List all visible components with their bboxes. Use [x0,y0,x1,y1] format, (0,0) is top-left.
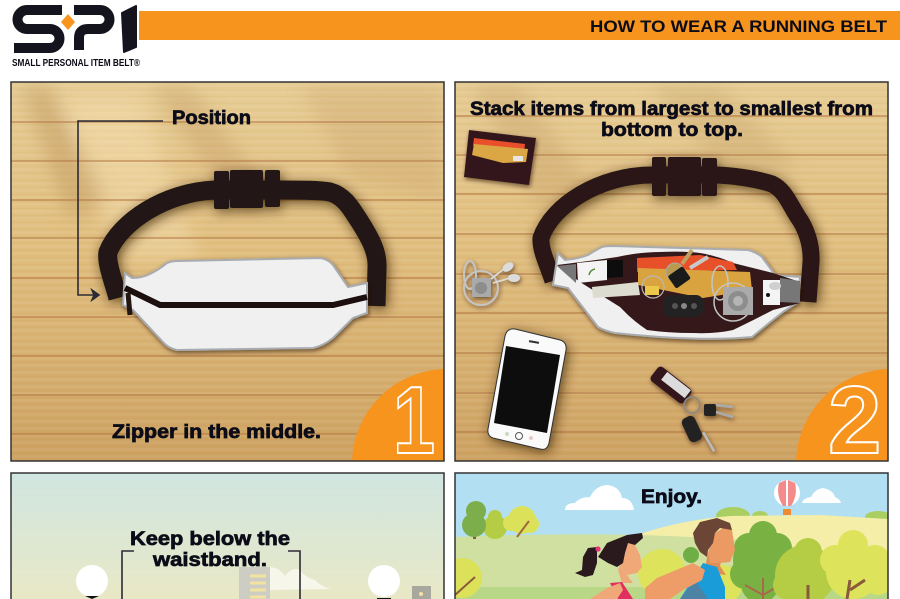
waistband brackets [122,551,300,599]
pouch interior [557,252,800,333]
small white device [763,280,781,305]
dark green tree [730,521,792,599]
cloud [270,567,331,590]
small building [412,586,431,599]
heading: stack items [470,99,873,141]
header bar [139,11,900,40]
zipper pull [128,293,130,315]
belt strap and buckle [541,157,811,302]
man runner [645,518,735,599]
trees upper left [462,501,539,539]
position arrow [78,121,163,300]
tree lower left [442,558,482,598]
panel 2: stacking items [456,82,888,460]
smartphone [488,329,566,449]
street lamp right [368,565,400,599]
position label: Position [172,108,251,129]
pouch sim chip [642,276,664,298]
heading: stack items: bottom to top. [601,120,743,141]
zipper [125,288,367,305]
yellow-green tree [773,538,835,599]
logo: SPI brand mark [14,6,136,52]
green field [455,534,888,599]
red card [637,255,737,272]
yellow hill [642,515,888,552]
woman runner [575,533,643,599]
yellow card [638,268,752,298]
header title: HOW TO WEAR A RUNNING BELT [590,17,888,36]
leaf behind man [683,547,699,563]
belt pouch [123,258,367,350]
open pouch [553,246,800,339]
ipod and cord in pouch [712,266,753,321]
clouds [565,485,841,510]
distant bushes [716,507,888,519]
logo tagline: SMALL PERSONAL ITEM BELT® [12,58,141,69]
pouch side tabs [557,264,800,303]
heading: stack items: Stack items from largest to smallest from [470,99,873,120]
street lamp left [76,565,108,599]
belt strap and buckle [108,170,377,306]
number badge 1: 1 [393,367,435,474]
number badge 2: 2 [828,367,881,474]
building [239,567,270,599]
heading: enjoy: Enjoy. [641,487,702,508]
key ring with tag and keys [649,365,733,451]
panel 1: position [12,82,444,460]
key blade [592,282,640,298]
ipod with earbuds [464,260,520,305]
heading: keep below: Keep below the [130,529,290,550]
wallet [464,130,536,185]
panel 3: waistband [11,473,444,599]
car key fob [663,295,703,317]
number badge 2 [796,369,888,460]
heading: keep below: waistband. [152,550,267,571]
caption: zipper: Zipper in the middle. [112,422,321,443]
heading: keep below [131,530,290,566]
hot air balloon [774,480,800,515]
panel 4: enjoy [442,473,893,599]
phone in pouch [577,260,623,283]
keys and tag [666,250,708,289]
yellow tree [820,530,893,599]
bush behind runners [638,549,742,599]
number badge 1 [352,369,444,460]
